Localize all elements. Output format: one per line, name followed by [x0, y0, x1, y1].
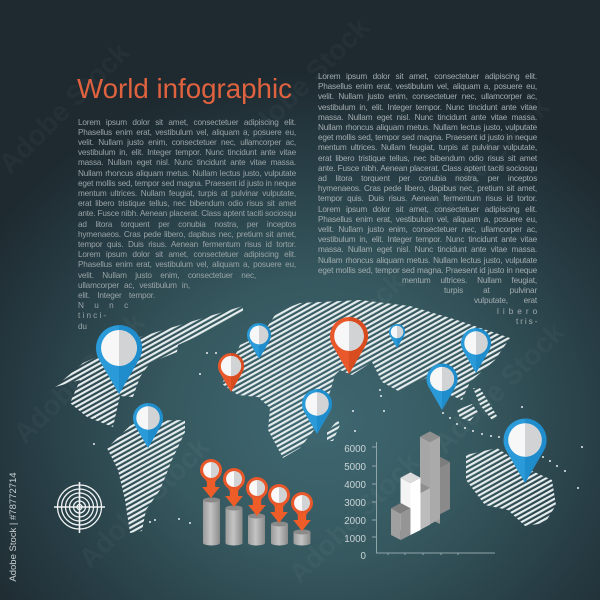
pin: Middle East	[330, 317, 368, 374]
text block: left column: Lorem ipsum dolor sit amet, consectetuer adipiscing elit.	[78, 250, 296, 259]
world map	[55, 300, 583, 533]
text block: right column: Lorem ipsum dolor sit amet, consectetuer adipiscing elit.	[318, 205, 537, 214]
watermarks: Adobe Stock	[232, 11, 376, 154]
text block: left column: eget mollis sed, tempor sed magna. Praesent id justo in neque	[78, 179, 296, 188]
text block: left column: mentum ultrices. Nullam feugiat, turpis at pulvinar vulputate,	[78, 189, 296, 198]
text block: right column: Phasellus enim erat, vestibulum vel, aliquam a, posuere eu,	[318, 82, 537, 91]
text block: right column: Lorem ipsum dolor sit amet, consectetuer adipiscing elit.	[318, 72, 537, 81]
cylinder 5	[294, 530, 310, 546]
pin: Europe	[247, 323, 271, 359]
text block: right column: massa. Nullam eget nisl. Nunc tincidunt ante vitae massa.	[318, 113, 537, 122]
text block: left column: Phasellus enim erat, vestibulum vel, aliquam a, posuere eu,	[78, 128, 296, 137]
axis labels	[344, 444, 367, 562]
watermarks: Adobe Stock	[282, 446, 426, 589]
cylinder 4	[271, 522, 288, 546]
text block: right column: tempor quis. Duis risus. Aenean fermentum risus id tortor.	[318, 194, 537, 203]
text block: right column: turpis at pulvinar	[444, 286, 537, 295]
pin: North Africa	[218, 353, 244, 392]
pin: South America	[133, 403, 163, 448]
text block: right column: massa. Nullam eget nisl. Nunc tincidunt ante vitae massa.	[318, 245, 537, 254]
arrow pin 1	[200, 459, 222, 498]
bar 2	[400, 472, 420, 535]
arrow pin 2	[223, 468, 245, 507]
text block: right column: mentum ultrices. Nullam feugiat,	[402, 276, 537, 285]
axis labels: 6000	[344, 444, 367, 455]
arrow pin 3	[246, 477, 268, 516]
cylinder 3	[248, 514, 265, 546]
text block: left column: ante. Fusce nibh. Aenean placerat. Class aptent taciti sociosqu	[78, 209, 296, 218]
text block: left column: velit. Nullam justo enim, consectetuer nec, ullamcorper ac,	[78, 138, 296, 147]
text block: left column: Nullam rhoncus aliquam metus. Nullam lectus justo, vulputate	[78, 169, 296, 178]
pin: East Africa	[302, 389, 332, 434]
continent: Australia	[466, 448, 556, 526]
pin: Australia	[504, 418, 547, 483]
text block: right column: Nullam rhoncus aliquam metus. Nullam lectus justo, vulputate	[318, 256, 537, 265]
watermarks: Adobe Stock	[267, 266, 411, 409]
pin: East Asia	[461, 328, 491, 373]
text block: left column: t i n c i -	[78, 311, 106, 320]
text block: left column: massa. Nullam eget nisl. Nunc tincidunt ante vitae massa.	[78, 158, 296, 167]
text block: right column: eget mollis sed, tempor sed magna. Praesent id justo in neque	[318, 266, 537, 275]
continent: South America	[107, 420, 185, 533]
text block: right column: hymenaeos. Cras pede libero, dapibus nec, pretium sit amet,	[318, 184, 537, 193]
continent: North America	[55, 306, 243, 427]
text block: left column: vestibulum in, elit. Integer tempor. Nunc tincidunt ante vitae	[78, 148, 296, 157]
axis labels: 2000	[344, 516, 367, 527]
cylinder 2	[226, 506, 242, 546]
axis labels: 1000	[344, 534, 367, 545]
cylinder chart with pins	[200, 459, 313, 546]
text block: left column: Lorem ipsum dolor sit amet, consectetuer adipiscing elit.	[78, 118, 296, 126]
text block: right column: t r i s -	[516, 317, 537, 326]
bar 3	[410, 483, 430, 530]
arrow pin 4	[268, 484, 290, 523]
continent: Eurasia and Africa	[222, 300, 510, 458]
text block: right column: mentum ultrices. Nullam feugiat, turpis at pulvinar vulputate,	[318, 143, 537, 152]
text block: left column: hymenaeos. Cras pede libero, dapibus nec, pretium sit amet,	[78, 230, 296, 239]
text block: left column: du	[78, 322, 87, 331]
island: Madagascar	[327, 420, 340, 441]
text block: right column: Nullam rhoncus aliquam metus. Nullam lectus justo, vulputate	[318, 123, 537, 132]
watermarks: Adobe Stock	[412, 91, 556, 234]
isometric bar chart	[344, 431, 495, 562]
icon: target crosshair	[54, 482, 105, 533]
axes	[372, 442, 495, 555]
title: World infographic	[77, 72, 292, 104]
text block: right column: vulputate, erat	[474, 296, 537, 305]
arrow pin 5	[291, 492, 313, 531]
axis labels: 0	[361, 551, 367, 562]
text block: right column: Phasellus enim erat, vestibulum vel, aliquam a, posuere eu,	[318, 215, 537, 224]
pin: South-East Asia	[426, 363, 458, 410]
axis labels: 4000	[344, 480, 367, 491]
bar 4	[420, 431, 440, 524]
text block: right column	[318, 72, 538, 326]
side credit: Adobe Stock | #78772714	[8, 472, 19, 582]
text block: left column: velit. Nullam justo enim, consectetuer nec,	[78, 271, 256, 280]
islands: South-East Asia	[457, 388, 497, 421]
text block: left column: ad litora torquent per conubia nostra, per inceptos	[78, 220, 296, 229]
text block: left column: erat libero tristique tellus, nec bibendum odio risus sit amet	[78, 199, 296, 208]
text block: right column: vestibulum in, elit. Integer tempor. Nunc tincidunt ante vitae	[318, 235, 537, 244]
text block: left column: ullamcorper ac, vestibulum in,	[78, 281, 190, 290]
text block: right column: velit. Nullam justo enim, consectetuer nec, ullamcorper ac,	[318, 92, 537, 101]
bar 1	[391, 503, 410, 540]
text block: left column: elit. Integer tempor.	[78, 291, 155, 300]
axis labels: 5000	[344, 462, 367, 473]
cylinder 1	[203, 498, 220, 546]
text block: left column: N u n c	[78, 301, 128, 310]
watermarks: Adobe Stock	[427, 316, 571, 459]
text block: right column: erat libero tristique tellus, nec bibendum odio risus sit amet	[318, 154, 537, 163]
text block: right column: l i b e r o	[497, 307, 537, 316]
text block: left column: tempor quis. Duis risus. Aenean fermentum risus id tortor.	[78, 240, 296, 249]
island dots	[93, 352, 583, 524]
watermarks: Adobe Stock	[7, 306, 151, 449]
text block: right column: ad litora torquent per conubia nostra, per inceptos	[318, 174, 537, 183]
text block: right column: vestibulum in, elit. Integer tempor. Nunc tincidunt ante vitae	[318, 103, 537, 112]
pin: North America	[96, 325, 142, 394]
watermarks: Adobe Stock	[72, 431, 216, 574]
text block: right column: velit. Nullam justo enim, consectetuer nec, ullamcorper ac,	[318, 225, 537, 234]
text block: right column: ante. Fusce nibh. Aenean placerat. Class aptent taciti sociosqu	[318, 164, 537, 173]
bar 5	[430, 457, 450, 524]
text block: left column	[78, 118, 296, 331]
axis labels: 3000	[344, 498, 367, 509]
pin: Central Asia	[389, 324, 405, 348]
text block: left column: Phasellus enim erat, vestibulum vel, aliquam a, posuere eu,	[78, 260, 296, 269]
text block: right column: eget mollis sed, tempor sed magna. Praesent id justo in neque	[318, 133, 537, 142]
